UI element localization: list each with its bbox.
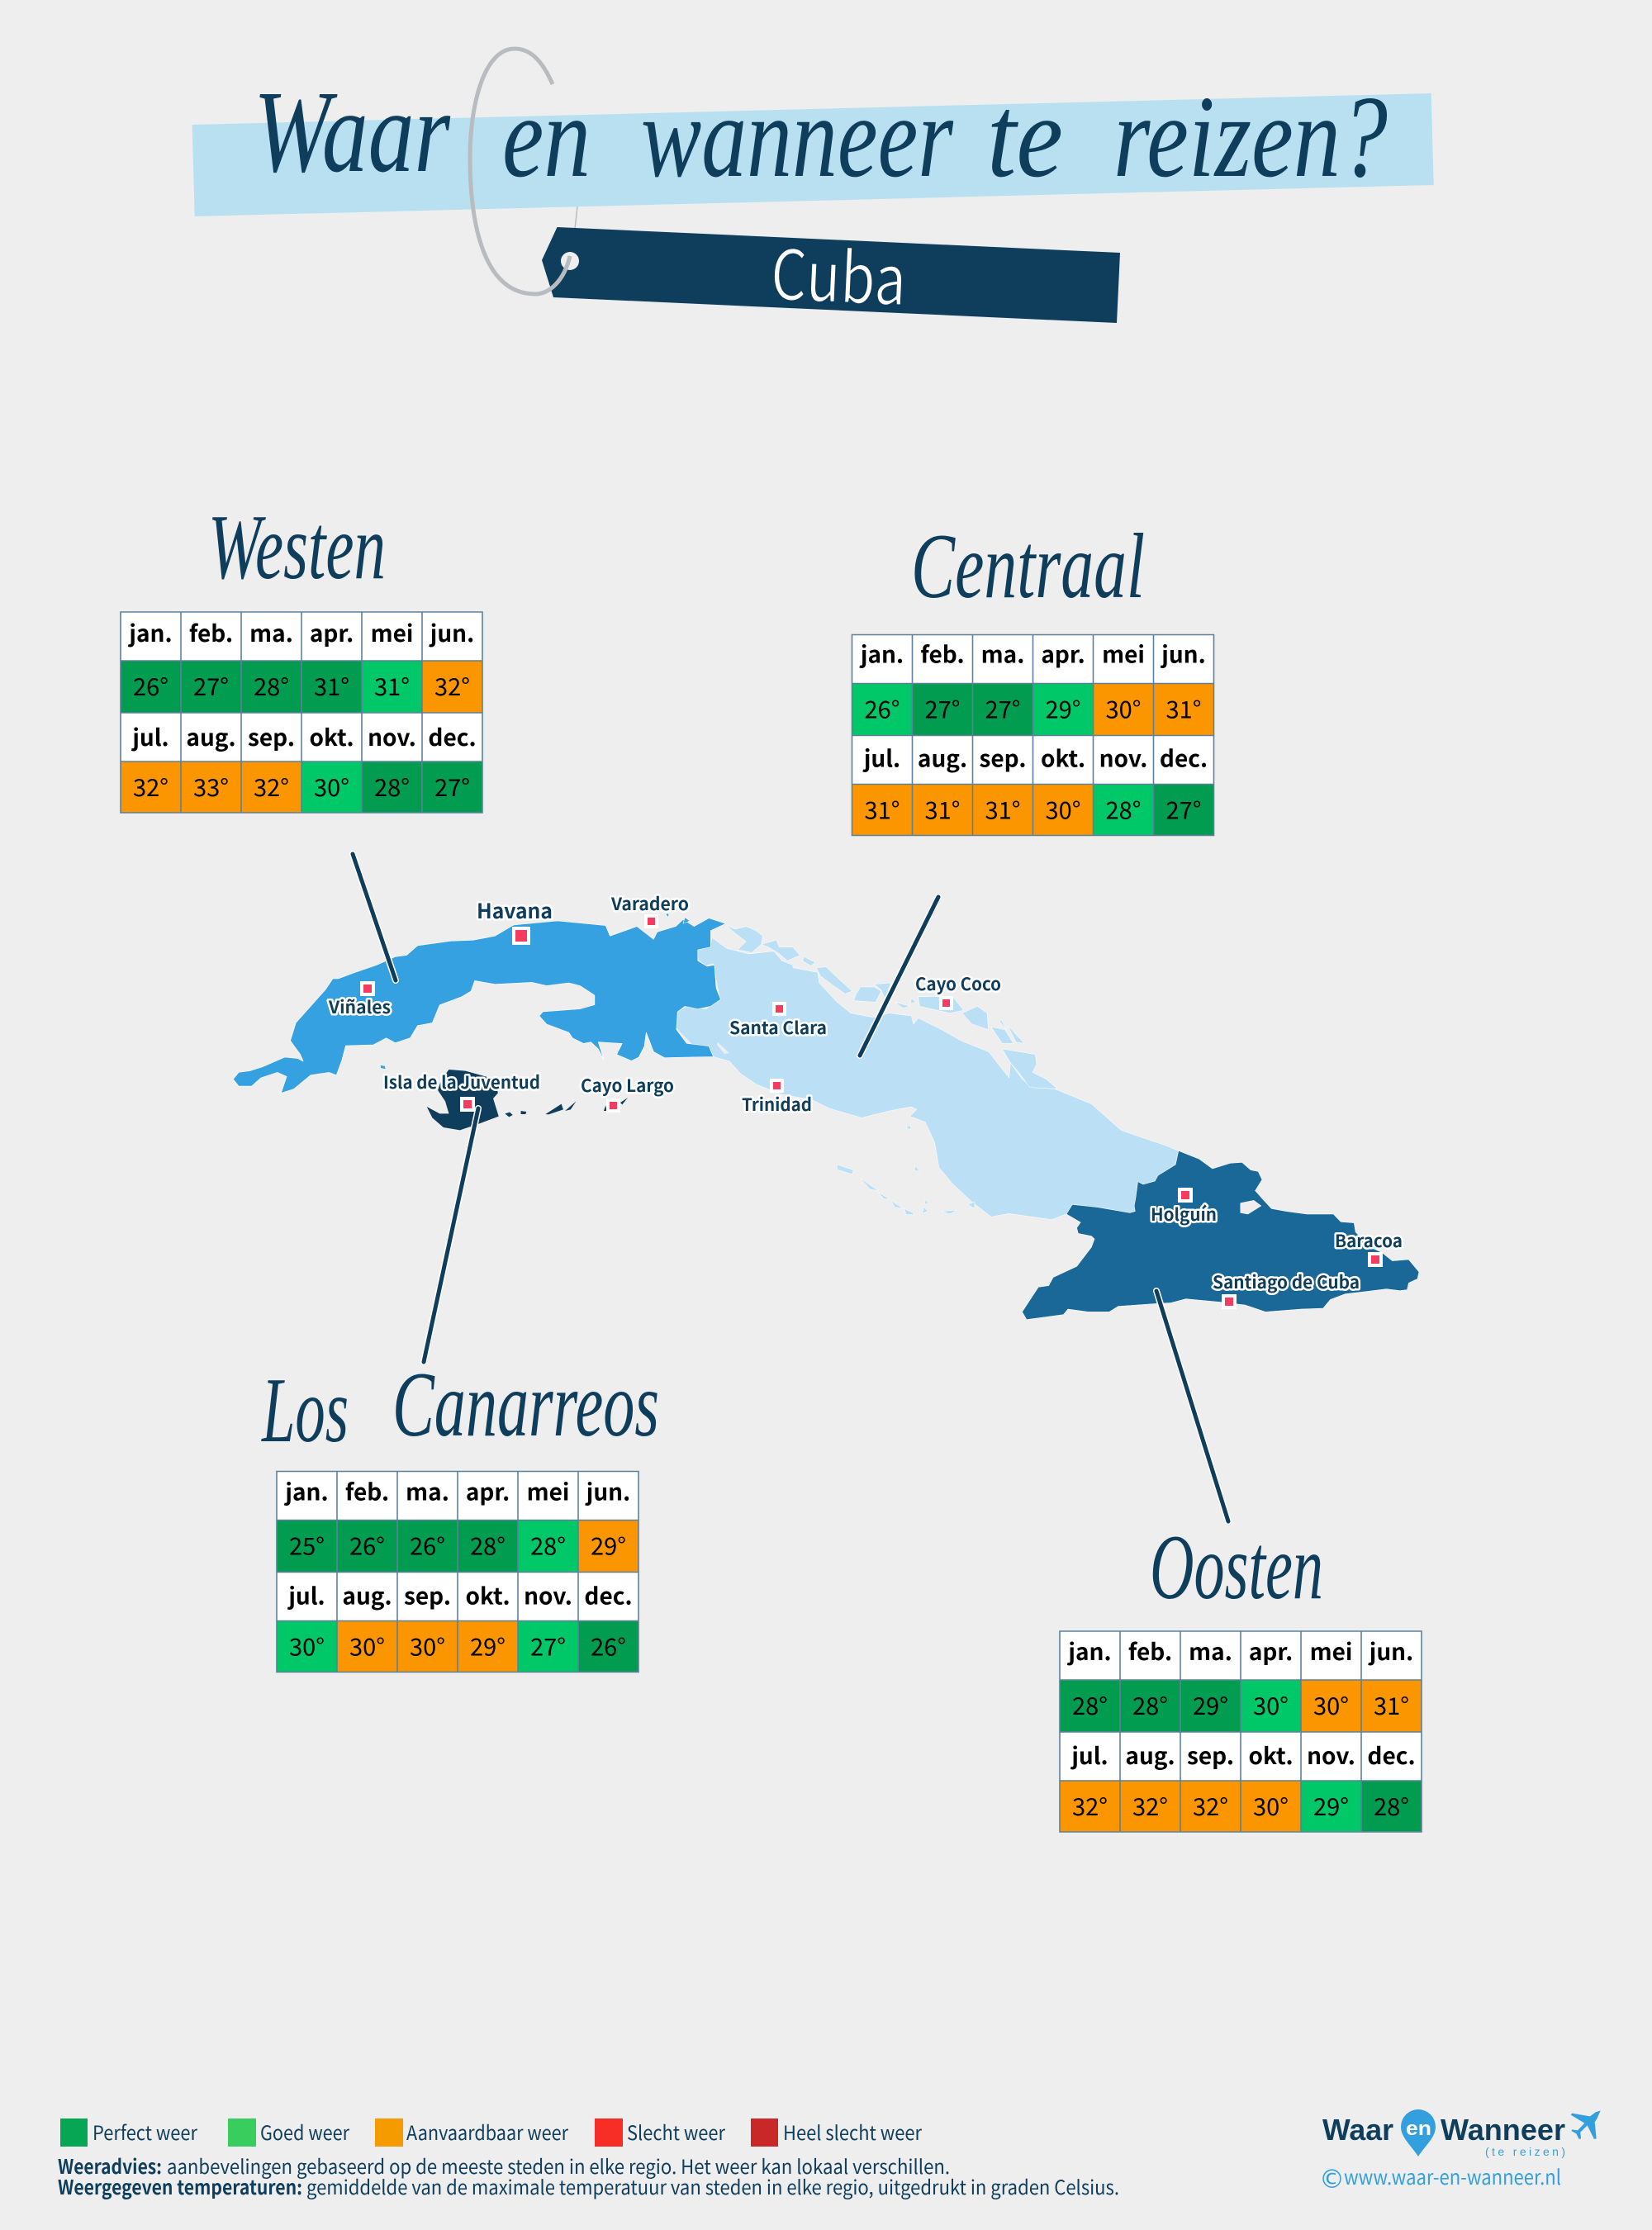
table: Oosten: 28° bbox=[1072, 1687, 1108, 1722]
table: Westen: sep. bbox=[248, 720, 295, 753]
table: Westen: 32° bbox=[133, 769, 169, 804]
table: Westen: 32° bbox=[434, 668, 470, 703]
table: Centraal: sep. bbox=[980, 742, 1026, 775]
table: Oosten: 30° bbox=[1253, 1788, 1289, 1823]
city labels: Cayo Coco bbox=[915, 971, 1001, 996]
table: Westen: jul. bbox=[131, 720, 169, 753]
logo: en bbox=[1406, 2118, 1431, 2140]
table: Centraal: okt. bbox=[1041, 742, 1085, 775]
table: Oosten: jul. bbox=[1070, 1739, 1108, 1772]
table: Los Canarreos: jan. bbox=[283, 1475, 329, 1508]
region: Westen (blue) bbox=[233, 913, 725, 1093]
table: Centraal: aug. bbox=[918, 742, 967, 775]
table: Los Canarreos: 29° bbox=[591, 1528, 626, 1563]
region: Oosten (dark blue) bbox=[1022, 1151, 1419, 1320]
table: Los Canarreos: 28° bbox=[470, 1528, 506, 1563]
title: reizen? bbox=[1113, 71, 1388, 202]
leader line: Westen bbox=[353, 854, 396, 980]
table: Centraal: feb. bbox=[920, 638, 965, 671]
city labels: Varadero bbox=[610, 891, 689, 916]
table: Centraal: 30° bbox=[1106, 690, 1141, 725]
table: Oosten: 32° bbox=[1193, 1788, 1228, 1823]
title: te bbox=[987, 71, 1063, 202]
table: Centraal: 27° bbox=[925, 690, 960, 725]
title banner bbox=[192, 93, 1434, 216]
region: Los Canarreos (navy) bbox=[427, 1070, 628, 1130]
footnotes: Weeradvies: bbox=[58, 2151, 162, 2180]
table: Centraal: jul. bbox=[862, 742, 900, 775]
legend: Aanvaardbaar weer bbox=[406, 2117, 569, 2146]
table: Centraal: nov. bbox=[1099, 742, 1147, 775]
table: Oosten: jun. bbox=[1368, 1635, 1413, 1668]
table: Westen bbox=[121, 612, 482, 813]
footnotes bbox=[58, 2151, 1119, 2200]
table: Centraal: 31° bbox=[1166, 690, 1201, 725]
city labels: Viñales bbox=[328, 994, 391, 1019]
table: Los Canarreos: aug. bbox=[342, 1579, 392, 1612]
table: Oosten: ma. bbox=[1189, 1635, 1232, 1668]
leader line: Centraal bbox=[860, 897, 938, 1056]
table: Centraal: 31° bbox=[865, 791, 900, 826]
table: Westen: nov. bbox=[368, 720, 416, 753]
heading: Los Canarreos: Los bbox=[261, 1359, 349, 1462]
logo: Waar bbox=[1322, 2113, 1393, 2147]
leader line: Oosten bbox=[1156, 1291, 1228, 1521]
table: Westen: jan. bbox=[127, 616, 173, 649]
table: Oosten bbox=[1060, 1631, 1422, 1832]
table: Centraal: 27° bbox=[985, 690, 1020, 725]
table: Centraal: 26° bbox=[865, 690, 900, 725]
table: Westen: 26° bbox=[133, 668, 169, 703]
table: Westen: 32° bbox=[254, 769, 289, 804]
city labels: Santa Clara bbox=[729, 1015, 827, 1040]
table: Los Canarreos: 26° bbox=[591, 1629, 626, 1663]
region: Centraal (light blue) bbox=[676, 925, 1179, 1220]
table: Los Canarreos: 28° bbox=[530, 1528, 566, 1563]
table: Los Canarreos: 30° bbox=[410, 1629, 445, 1663]
table: Los Canarreos: 30° bbox=[349, 1629, 385, 1663]
map of Cuba bbox=[233, 913, 1419, 1320]
city labels: Cayo Largo bbox=[581, 1073, 674, 1098]
city labels: Santiago de Cuba bbox=[1213, 1269, 1360, 1294]
legend bbox=[60, 2117, 923, 2147]
ring bbox=[470, 49, 570, 294]
heading: Centraal: Centraal bbox=[911, 515, 1145, 618]
table: Los Canarreos: okt. bbox=[465, 1579, 510, 1612]
table: Oosten: 32° bbox=[1132, 1788, 1168, 1823]
city labels: Baracoa bbox=[1335, 1228, 1403, 1253]
table: Westen: 28° bbox=[254, 668, 289, 703]
table: Oosten: nov. bbox=[1307, 1739, 1355, 1772]
table: Oosten: 29° bbox=[1193, 1687, 1228, 1722]
table: Oosten: 31° bbox=[1374, 1687, 1409, 1722]
table: Los Canarreos: mei bbox=[527, 1475, 569, 1508]
table: Los Canarreos: jul. bbox=[287, 1579, 325, 1612]
table: Oosten: 28° bbox=[1132, 1687, 1168, 1722]
table: Los Canarreos: nov. bbox=[524, 1579, 572, 1612]
table: Los Canarreos: jun. bbox=[585, 1475, 630, 1508]
city markers bbox=[362, 916, 1381, 1307]
table: Westen: dec. bbox=[428, 720, 477, 753]
logo: Wanneer bbox=[1441, 2113, 1565, 2147]
city labels: Holguín bbox=[1151, 1202, 1217, 1226]
table: Westen: 31° bbox=[314, 668, 349, 703]
table: Oosten: aug. bbox=[1125, 1739, 1175, 1772]
logo: www.waar-en-wanneer.nl bbox=[1344, 2161, 1561, 2191]
table: Oosten: 28° bbox=[1374, 1788, 1409, 1823]
icon: copyright: © bbox=[1319, 2165, 1345, 2194]
table: Centraal: apr. bbox=[1041, 638, 1085, 671]
inlet in Centraal bbox=[717, 1042, 729, 1054]
icon: map pin bbox=[1401, 2109, 1436, 2156]
leader line: Los Canarreos bbox=[424, 1108, 478, 1362]
table: Westen: 27° bbox=[434, 769, 470, 804]
table: Oosten: sep. bbox=[1187, 1739, 1234, 1772]
table: Los Canarreos: 26° bbox=[410, 1528, 445, 1563]
heading: Los Canarreos bbox=[261, 1354, 659, 1462]
city labels: Isla de la Juventud bbox=[383, 1070, 540, 1094]
title: wanneer bbox=[641, 71, 954, 202]
table: Los Canarreos: 29° bbox=[470, 1629, 506, 1663]
legend: Goed weer bbox=[260, 2117, 350, 2146]
footnotes: gemiddelde van de maximale temperatuur van steden in elke regio, uitgedrukt in graden Celsius. bbox=[306, 2171, 1119, 2200]
table: Los Canarreos bbox=[277, 1472, 638, 1672]
table: Westen: jun. bbox=[429, 616, 474, 649]
table: Los Canarreos: 26° bbox=[349, 1528, 385, 1563]
city labels bbox=[328, 891, 1403, 1294]
table: Los Canarreos: 25° bbox=[289, 1528, 325, 1563]
table: Westen: 27° bbox=[193, 668, 229, 703]
table: Oosten: 30° bbox=[1313, 1687, 1349, 1722]
heading: Westen: Westen bbox=[208, 496, 386, 599]
table: Centraal bbox=[852, 634, 1214, 836]
table: Oosten: 30° bbox=[1253, 1687, 1289, 1722]
city labels: Trinidad bbox=[742, 1092, 812, 1117]
table: Centraal: 28° bbox=[1106, 791, 1141, 826]
table: Centraal: jan. bbox=[859, 638, 904, 671]
tag text: Cuba: Cuba bbox=[769, 220, 909, 325]
table: Los Canarreos: dec. bbox=[584, 1579, 633, 1612]
footnotes: Weergegeven temperaturen: bbox=[58, 2171, 302, 2200]
legend: Heel slecht weer bbox=[783, 2117, 923, 2146]
table: Los Canarreos: ma. bbox=[406, 1475, 449, 1508]
city labels: Havana bbox=[477, 895, 553, 925]
table: Westen: okt. bbox=[309, 720, 354, 753]
table: Oosten: 29° bbox=[1313, 1788, 1349, 1823]
table: Los Canarreos: apr. bbox=[466, 1475, 510, 1508]
table: Oosten: 32° bbox=[1072, 1788, 1108, 1823]
table: Los Canarreos: 30° bbox=[289, 1629, 325, 1663]
logo: (te reizen) bbox=[1485, 2145, 1565, 2158]
footnotes: aanbevelingen gebaseerd op de meeste steden in elke regio. Het weer kan lokaal verschillen. bbox=[167, 2151, 950, 2180]
table: Los Canarreos: sep. bbox=[404, 1579, 451, 1612]
logo bbox=[1319, 2109, 1601, 2194]
table: Oosten: mei bbox=[1310, 1635, 1352, 1668]
table: Centraal: 29° bbox=[1046, 690, 1080, 725]
table: Centraal: dec. bbox=[1160, 742, 1208, 775]
heading: Oosten: Oosten bbox=[1150, 1516, 1323, 1619]
legend: Slecht weer bbox=[627, 2117, 726, 2146]
table: Los Canarreos: feb. bbox=[345, 1475, 389, 1508]
table: Centraal: jun. bbox=[1160, 638, 1206, 671]
title bbox=[254, 66, 1388, 202]
table: Centraal: ma. bbox=[981, 638, 1024, 671]
ring string behind banner bbox=[575, 206, 577, 229]
legend: Perfect weer bbox=[93, 2117, 198, 2146]
table: Los Canarreos: 27° bbox=[530, 1629, 566, 1663]
table: Centraal: 27° bbox=[1166, 791, 1201, 826]
table: Oosten: apr. bbox=[1249, 1635, 1293, 1668]
destination tag bbox=[542, 220, 1120, 325]
table: Oosten: dec. bbox=[1367, 1739, 1416, 1772]
icon: airplane bbox=[1571, 2110, 1601, 2139]
table: Westen: aug. bbox=[186, 720, 236, 753]
title: Waar bbox=[254, 66, 451, 197]
table: Westen: 28° bbox=[374, 769, 410, 804]
table: Westen: 30° bbox=[314, 769, 349, 804]
table: Oosten: feb. bbox=[1128, 1635, 1172, 1668]
table: Centraal: 31° bbox=[985, 791, 1020, 826]
table: Westen: apr. bbox=[310, 616, 354, 649]
heading: Los Canarreos: Canarreos bbox=[392, 1354, 659, 1456]
table: Westen: 31° bbox=[374, 668, 410, 703]
table: Oosten: jan. bbox=[1066, 1635, 1112, 1668]
table: Centraal: 31° bbox=[925, 791, 960, 826]
table: Centraal: 30° bbox=[1046, 791, 1080, 826]
title: en bbox=[502, 71, 591, 202]
table: Westen: feb. bbox=[189, 616, 233, 649]
table: Westen: 33° bbox=[193, 769, 229, 804]
table: Centraal: mei bbox=[1102, 638, 1145, 671]
table: Westen: ma. bbox=[249, 616, 293, 649]
table: Westen: mei bbox=[371, 616, 413, 649]
table: Oosten: okt. bbox=[1248, 1739, 1294, 1772]
